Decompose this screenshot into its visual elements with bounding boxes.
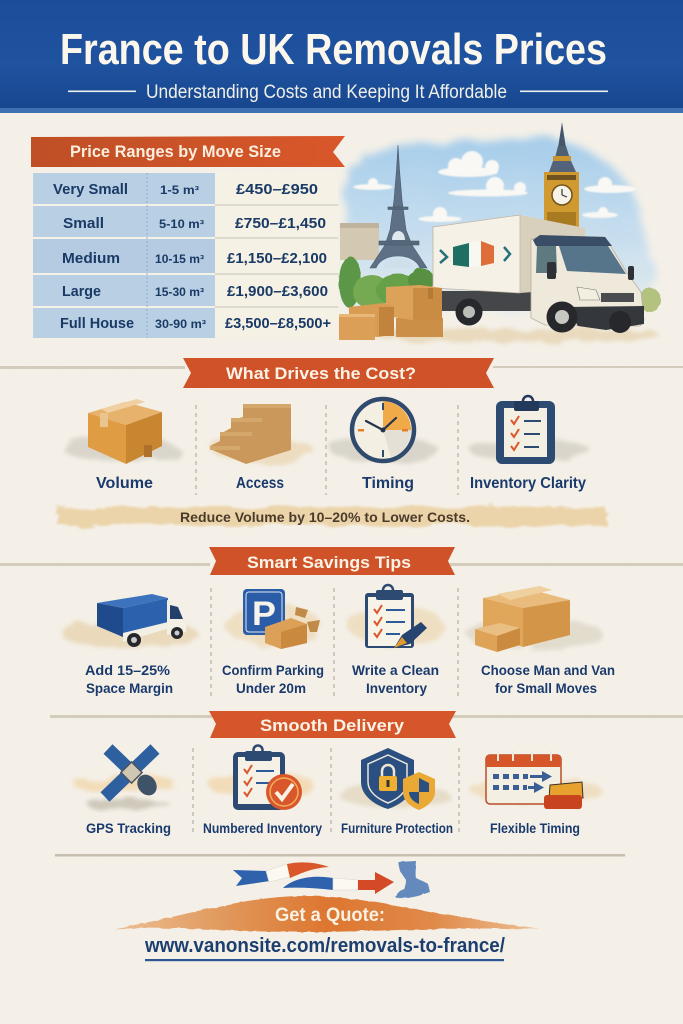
removal truck <box>433 215 644 333</box>
price table <box>33 172 338 338</box>
icon: cardboard box: Volume <box>96 475 153 492</box>
ribbon heading <box>209 711 456 738</box>
callout: reduce volume: Reduce Volume by 10–20% to Lower Costs. <box>180 509 470 525</box>
icon: numbered inventory: Numbered Inventory <box>203 821 322 836</box>
trees <box>339 256 434 309</box>
header banner <box>0 0 683 113</box>
row: full house <box>60 315 331 332</box>
wheels <box>456 298 482 326</box>
row: full house: 30-90 m³ <box>155 319 206 331</box>
icon: clipboard with pen <box>347 585 443 696</box>
row: full house: £3,500–£8,500+ <box>225 316 331 332</box>
icon: numbered inventory <box>203 746 322 836</box>
icon: blue truck: Space Margin <box>86 680 173 696</box>
row: full house: Full House <box>60 315 134 332</box>
icon: flexible timing calendar: Flexible Timing <box>490 821 580 836</box>
icon: blue truck: Add 15–25% <box>85 662 171 678</box>
row: large: 15-30 m³ <box>155 287 204 299</box>
icon: stacked boxes <box>467 586 615 696</box>
icon: parking sign: Confirm Parking <box>222 662 324 678</box>
icon: cardboard box <box>64 399 180 492</box>
icon: stacked boxes: for Small Moves <box>495 680 597 696</box>
icon: satellite: GPS Tracking <box>86 821 171 836</box>
ribbon heading: Smooth Delivery <box>260 716 405 735</box>
row: large <box>62 283 328 300</box>
icon: furniture protection: Furniture Protection <box>341 821 453 836</box>
icon: stairs <box>210 404 312 492</box>
callout: reduce volume <box>58 507 606 526</box>
icon: parking sign: P <box>252 595 276 633</box>
row: large: £1,900–£3,600 <box>227 284 328 300</box>
truck chassis <box>442 291 542 311</box>
illustration: France to UK scene <box>339 122 661 342</box>
section: what drives the cost <box>0 358 683 526</box>
row: very small: £450–£950 <box>236 182 318 198</box>
row: medium <box>62 250 327 267</box>
subtitle: Understanding Costs and Keeping It Affordable <box>146 82 507 103</box>
icon: clipboard with pen: Inventory <box>366 680 427 696</box>
icon: clock: Timing <box>362 475 414 492</box>
title: France to UK Removals Prices <box>60 25 607 74</box>
row: small: 5-10 m³ <box>159 219 204 231</box>
icon: parking sign <box>222 589 324 696</box>
call to action: Get a Quote: <box>275 905 385 926</box>
sky wash <box>345 138 651 310</box>
flag logo <box>440 241 510 267</box>
icon: parking sign: Under 20m <box>236 680 306 696</box>
cargo box <box>520 215 585 293</box>
icon: blue truck <box>62 594 198 696</box>
ribbon: price ranges heading <box>31 136 345 167</box>
ribbon heading: Smart Savings Tips <box>247 553 411 572</box>
icon: stairs: Access <box>236 475 284 492</box>
icon: clipboard: Inventory Clarity <box>470 475 586 492</box>
icon: clipboard with pen: Write a Clean <box>352 662 439 678</box>
ribbon heading <box>209 547 455 575</box>
row: very small <box>53 181 318 198</box>
row: very small: Very Small <box>53 181 128 198</box>
section: smooth delivery <box>50 711 683 836</box>
row: small: Small <box>63 215 104 232</box>
Eiffel Tower <box>370 145 427 268</box>
side window <box>536 246 557 273</box>
row: medium: Medium <box>62 250 120 267</box>
cab roof <box>533 235 612 246</box>
icon: clock <box>330 399 440 492</box>
ribbon: price ranges heading: Price Ranges by Move Size <box>70 142 281 161</box>
clouds <box>353 151 636 222</box>
icon: flexible timing calendar <box>469 751 601 836</box>
grille and bumper <box>566 306 644 330</box>
call to action <box>113 896 540 961</box>
row: large: Large <box>62 283 101 300</box>
icon: stacked boxes: Choose Man and Van <box>481 662 615 678</box>
icon: UK map <box>395 861 430 899</box>
row: medium: £1,150–£2,100 <box>227 251 327 267</box>
icon: clipboard <box>470 396 590 492</box>
section: smart savings tips <box>0 547 683 697</box>
icon: furniture protection <box>340 748 453 836</box>
arrow: France to UK flag ribbons <box>233 862 394 894</box>
cab <box>531 236 644 326</box>
distant building <box>340 223 379 260</box>
icon: satellite <box>73 749 177 836</box>
row: small <box>63 215 326 232</box>
website link: www.vanonsite.com/removals-to-france/ <box>144 935 505 957</box>
ribbon heading <box>183 358 494 388</box>
Big Ben <box>544 122 579 228</box>
ground wash <box>360 328 660 342</box>
row: very small: 1-5 m³ <box>160 185 199 197</box>
row: medium: 10-15 m³ <box>155 254 204 266</box>
windshield <box>559 246 626 274</box>
ribbon heading: What Drives the Cost? <box>226 364 416 383</box>
distant bush <box>639 288 661 312</box>
row: small: £750–£1,450 <box>235 216 326 232</box>
moving boxes <box>339 285 443 340</box>
